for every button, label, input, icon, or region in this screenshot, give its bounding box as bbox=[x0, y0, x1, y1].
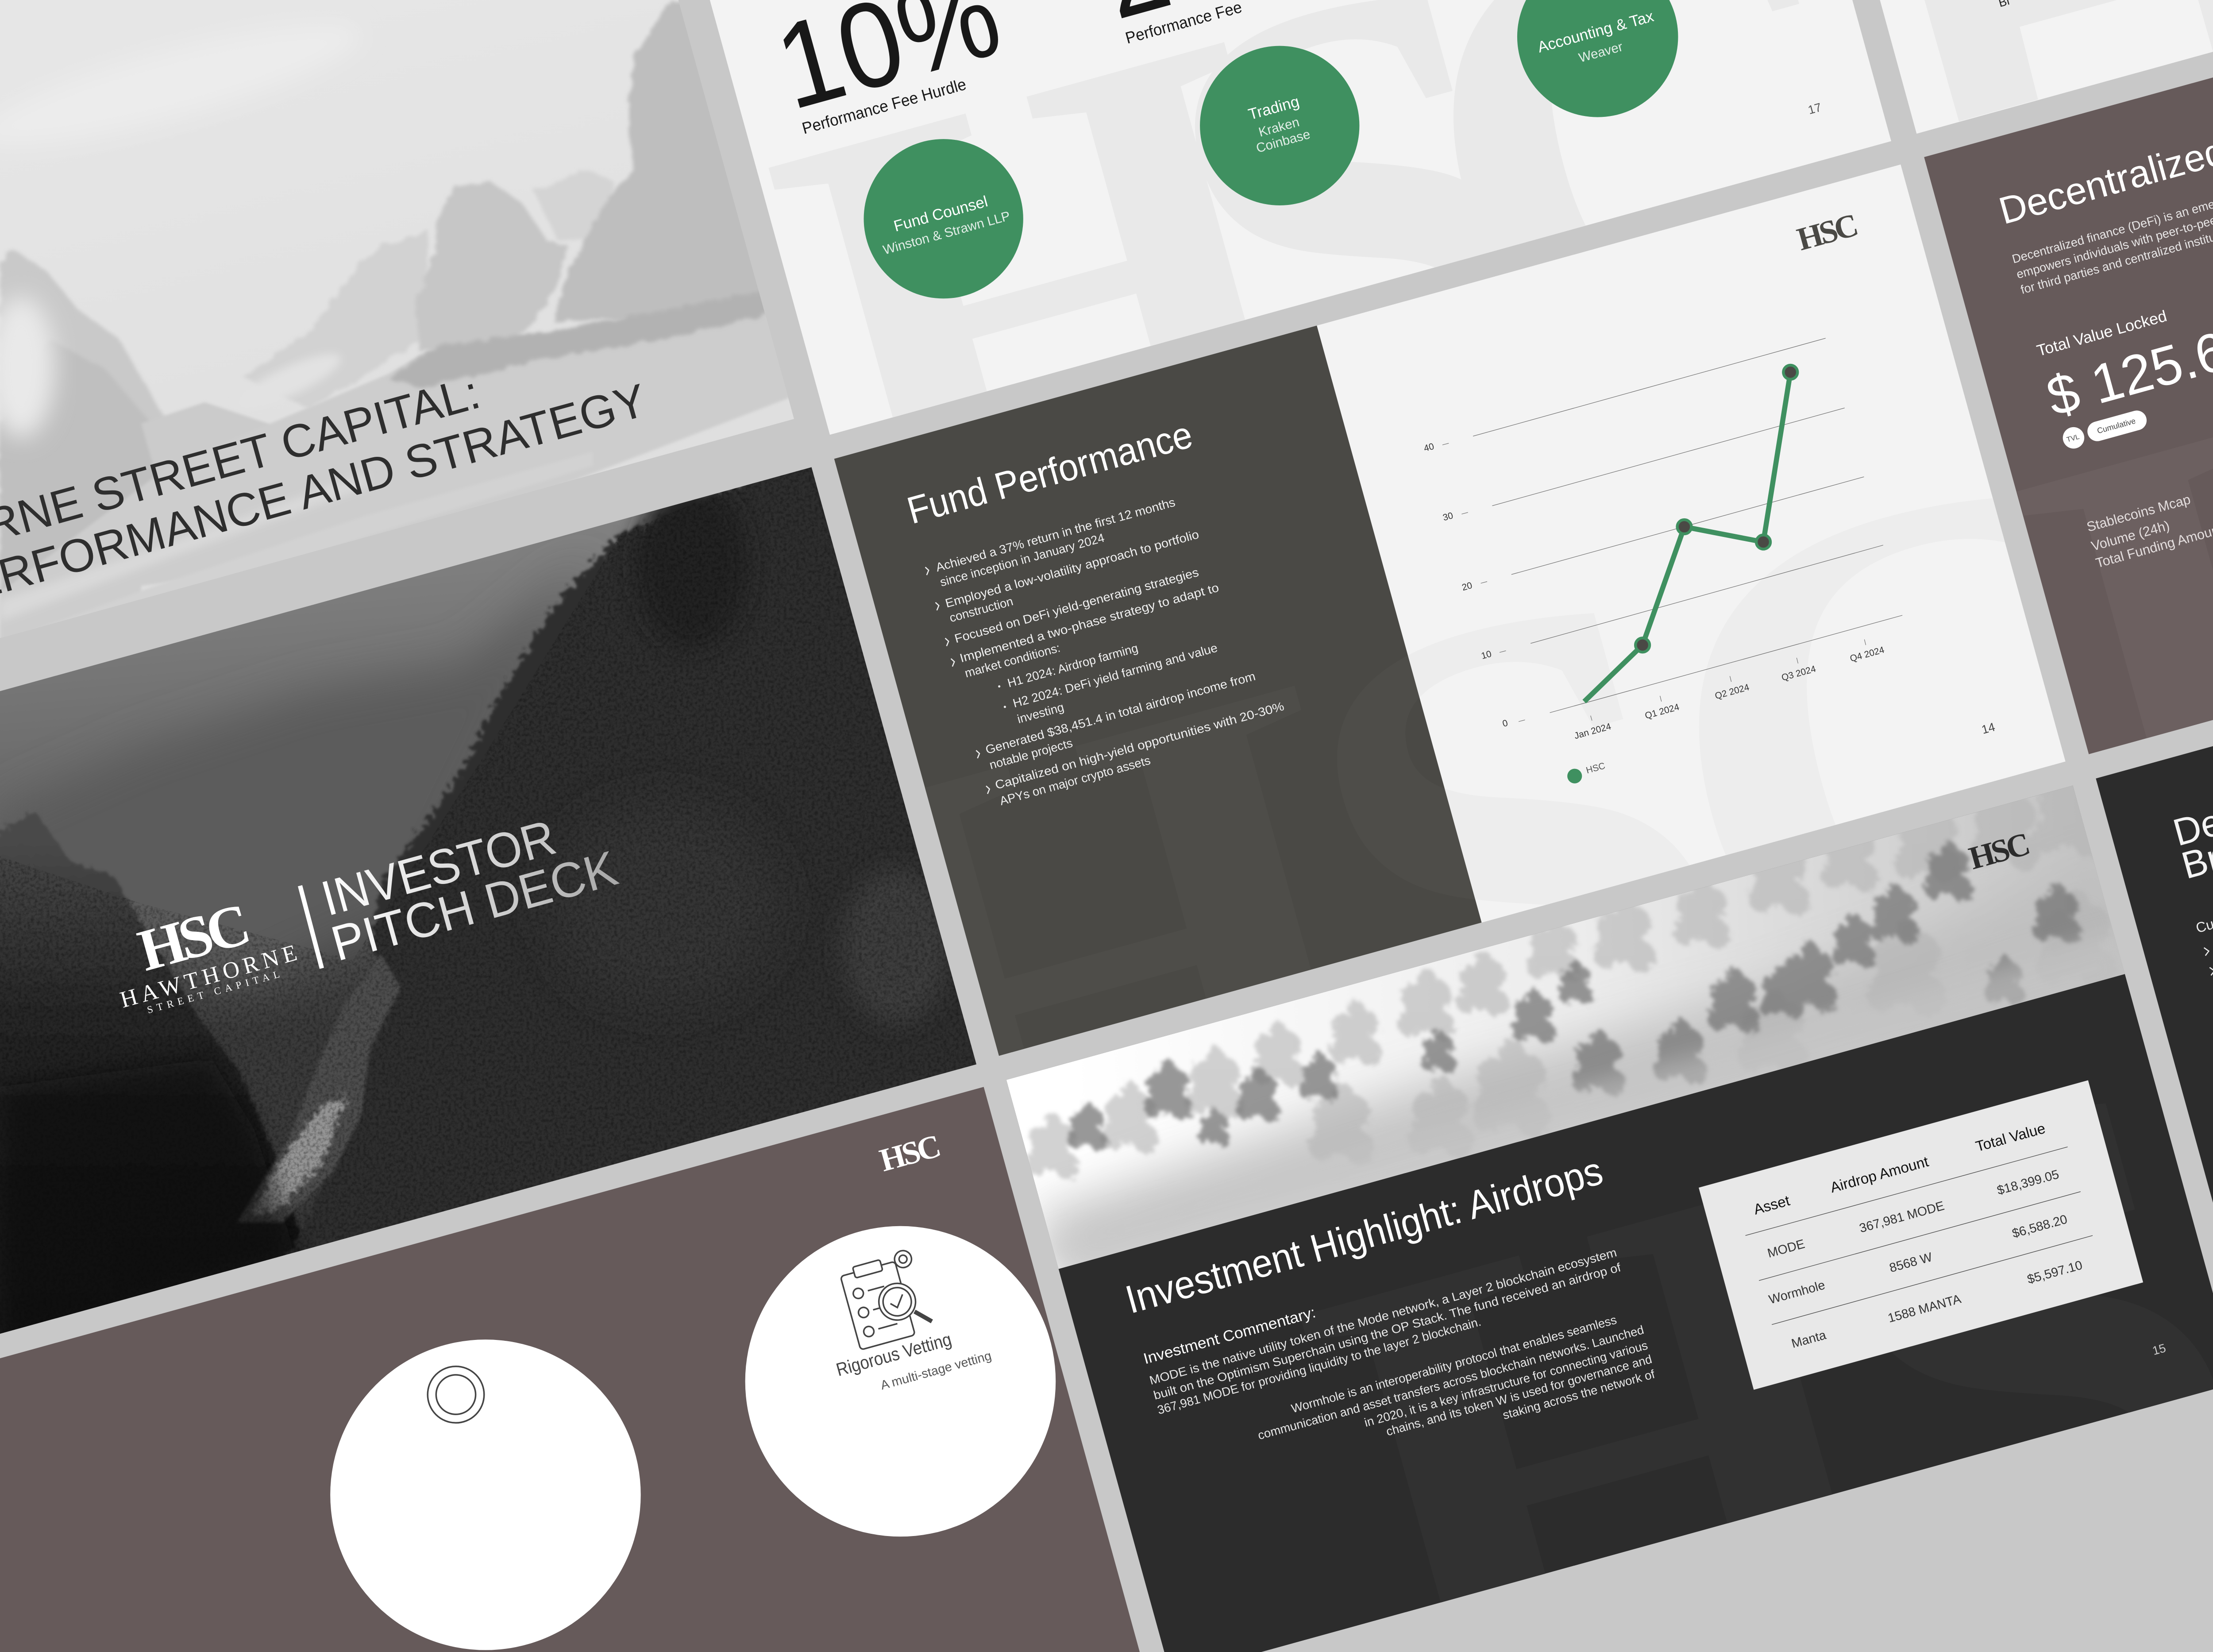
axis labels: 10 bbox=[1480, 649, 1492, 661]
icon: clipboard and magnifier bbox=[838, 1248, 934, 1350]
commentary heading: Investment Commentary: bbox=[1141, 1304, 1318, 1367]
page number: 15 bbox=[2151, 1341, 2167, 1358]
axis labels: Q1 2024 bbox=[1644, 702, 1681, 721]
market metrics bbox=[2085, 492, 2213, 571]
deck title: PITCH DECK bbox=[325, 840, 623, 972]
commentary body bbox=[1148, 1245, 1656, 1442]
table rows: 8568 W bbox=[1888, 1250, 1934, 1275]
airdrop table bbox=[1699, 1080, 2143, 1390]
logo lockup bbox=[117, 892, 300, 1015]
panel: forest cover slide bbox=[0, 452, 1002, 1383]
logo HSC: HSC bbox=[1793, 207, 1860, 257]
axis labels: Q2 2024 bbox=[1714, 682, 1750, 701]
commentary body: chains, and its token W is used for governance and bbox=[1384, 1352, 1654, 1439]
line chart bbox=[1423, 338, 1902, 784]
partner circle: accounting: Weaver bbox=[1577, 39, 1624, 66]
logo lockup: STREET CAPITAL bbox=[146, 969, 281, 1015]
table rules bbox=[1746, 1147, 2093, 1324]
panel: brown process slide bbox=[0, 1073, 1186, 1652]
heading: Fund Performance bbox=[902, 413, 1197, 532]
bullet markers bbox=[925, 567, 1006, 794]
circle: rigorous vetting: A multi-stage vetting bbox=[879, 1349, 993, 1393]
HSC series line bbox=[1584, 372, 1790, 702]
bullet list: APYs on major crypto assets bbox=[998, 753, 1152, 808]
circle: second process step bbox=[330, 1339, 641, 1650]
icon: partial globe bbox=[428, 1366, 484, 1423]
photo: washed out mountains bbox=[0, 0, 833, 706]
panel: top right slide fragment bbox=[1880, 0, 2213, 134]
table rows: $5,597.10 bbox=[2026, 1258, 2084, 1287]
axis labels: 0 bbox=[1501, 718, 1509, 729]
stat: performance fee hurdle: Performance Fee Hurdle bbox=[800, 75, 968, 138]
table rows: MODE bbox=[1766, 1237, 1806, 1261]
panel: investment highlight airdrops slide bbox=[1006, 769, 2213, 1652]
bullet list: since inception in January 2024 bbox=[938, 531, 1106, 589]
bullet list: H2 2024: DeFi yield farming and value bbox=[1011, 641, 1219, 710]
table rows: 1588 MANTA bbox=[1886, 1292, 1963, 1326]
text panel background bbox=[834, 325, 1482, 1056]
axis labels: Q3 2024 bbox=[1781, 664, 1817, 683]
watermark HSC on light side: HSC bbox=[733, 310, 2213, 1421]
bullet list: Capitalized on high-yield opportunities with 20-30% bbox=[994, 699, 1286, 792]
near trees bbox=[1068, 841, 2081, 1151]
bullet list: notable projects bbox=[988, 736, 1074, 772]
bullet list: Focused on DeFi yield-generating strategies bbox=[953, 565, 1200, 645]
table header bbox=[1752, 1120, 2047, 1218]
legend bbox=[1567, 760, 1606, 784]
market metrics: Stablecoins Mcap bbox=[2085, 492, 2192, 535]
logo HSC: HSC bbox=[1965, 826, 2032, 876]
bullet list: construction bbox=[948, 594, 1014, 625]
page number: 14 bbox=[1980, 720, 1997, 737]
commentary body: Wormhole is an interoperability protocol that enables seamless bbox=[1290, 1312, 1618, 1416]
partner circle: fund counsel: Winston & Strawn LLP bbox=[881, 208, 1012, 258]
logo HSC: HSC bbox=[876, 1128, 943, 1178]
watermark HSC on dark side: HSC bbox=[733, 310, 2213, 1421]
table rows: $18,399.05 bbox=[1996, 1167, 2061, 1198]
commentary body: staking across the network of bbox=[1501, 1367, 1656, 1422]
axis labels: Q4 2024 bbox=[1849, 645, 1885, 664]
partner circle: trading: Coinbase bbox=[1255, 127, 1312, 156]
bullet list: investing bbox=[1016, 700, 1065, 726]
axis labels: 20 bbox=[1461, 580, 1473, 593]
logo lockup: HSC bbox=[131, 892, 253, 984]
gridlines bbox=[1442, 338, 1902, 722]
tag pills: Cumulative bbox=[2096, 416, 2136, 436]
caption: Rigorous Vetting bbox=[834, 1328, 954, 1380]
axis labels: 40 bbox=[1423, 441, 1435, 454]
deck title: INVESTOR bbox=[316, 809, 562, 926]
table rows: $6,588.20 bbox=[2011, 1212, 2069, 1241]
partner circle: accounting bbox=[1517, 0, 1678, 117]
panel: fees and service providers slide bbox=[649, 0, 1928, 704]
panel: decentralized finance slide bbox=[1920, 0, 2213, 1087]
axis labels: Jan 2024 bbox=[1573, 721, 1612, 741]
partner circle: accounting: Accounting & Tax bbox=[1536, 8, 1656, 56]
tag pills: TVL bbox=[2066, 433, 2080, 444]
commentary body: 367,981 MODE for providing liquidity to the layer 2 blockchain. bbox=[1156, 1315, 1482, 1417]
page number: 17 bbox=[1806, 100, 1823, 117]
partner circle: fund counsel bbox=[864, 139, 1023, 298]
bullet list: Achieved a 37% return in the first 12 months bbox=[934, 495, 1176, 574]
TVL stat: Total Value Locked bbox=[2035, 307, 2169, 360]
tag pills bbox=[2063, 408, 2149, 448]
market metrics: Volume (24h) bbox=[2090, 518, 2171, 554]
commentary body: in 2020, it is a key infrastructure for connecting various bbox=[1363, 1338, 1649, 1429]
bullet list: Employed a low-volatility approach to portfolio bbox=[944, 527, 1200, 610]
photo: trees in fog bbox=[1006, 769, 2145, 1285]
table header: Total Value bbox=[1974, 1120, 2047, 1155]
bullet list bbox=[934, 495, 1286, 808]
heading: Investment Highlight: Airdrops bbox=[1121, 1148, 1607, 1322]
commentary body: MODE is the native utility token of the Mode network, a Layer 2 blockchain ecosystem bbox=[1148, 1245, 1618, 1387]
circle: rigorous vetting bbox=[745, 1226, 1056, 1536]
bullet list: market conditions: bbox=[963, 641, 1062, 680]
table rows bbox=[1766, 1167, 2084, 1351]
table rows: Manta bbox=[1790, 1328, 1827, 1351]
photo: foggy valley and forest bbox=[0, 452, 988, 1369]
partner circle: trading bbox=[1200, 46, 1359, 205]
partner circle: trading: Trading bbox=[1246, 93, 1301, 123]
bullet list: H1 2024: Airdrop farming bbox=[1006, 641, 1140, 690]
table rows: Wormhole bbox=[1767, 1278, 1827, 1307]
table header: Airdrop Amount bbox=[1828, 1154, 1930, 1196]
table header: Asset bbox=[1752, 1193, 1792, 1218]
bullet list: Generated $38,451.4 in total airdrop income from bbox=[984, 669, 1257, 757]
partner circle: trading: Kraken bbox=[1257, 115, 1301, 140]
panel: dark bridges slide fragment bbox=[2089, 734, 2213, 1440]
logo lockup: HAWTHORNE bbox=[117, 940, 300, 1013]
panel: mountain title slide bbox=[0, 0, 794, 638]
axis labels bbox=[1423, 441, 1885, 741]
commentary body: communication and asset transfers across blockchain networks. Launched bbox=[1256, 1323, 1645, 1442]
legend: HSC bbox=[1585, 760, 1606, 776]
divider bar bbox=[300, 886, 322, 969]
watermark shapes bbox=[1924, 0, 2117, 121]
axis labels: 30 bbox=[1442, 510, 1454, 523]
commentary body: built on the Optimism Superchain using the OP Stack. The fund received an airdrop of bbox=[1152, 1260, 1623, 1402]
data points bbox=[1635, 365, 1797, 652]
bullet list: Implemented a two-phase strategy to adapt to bbox=[958, 580, 1220, 665]
table rows: 367,981 MODE bbox=[1858, 1199, 1946, 1236]
partner circle: fund counsel: Fund Counsel bbox=[892, 193, 990, 235]
bullet markers bbox=[2204, 948, 2213, 975]
far trees bbox=[1026, 769, 2115, 1179]
panel: fund performance slide bbox=[733, 164, 2213, 1421]
